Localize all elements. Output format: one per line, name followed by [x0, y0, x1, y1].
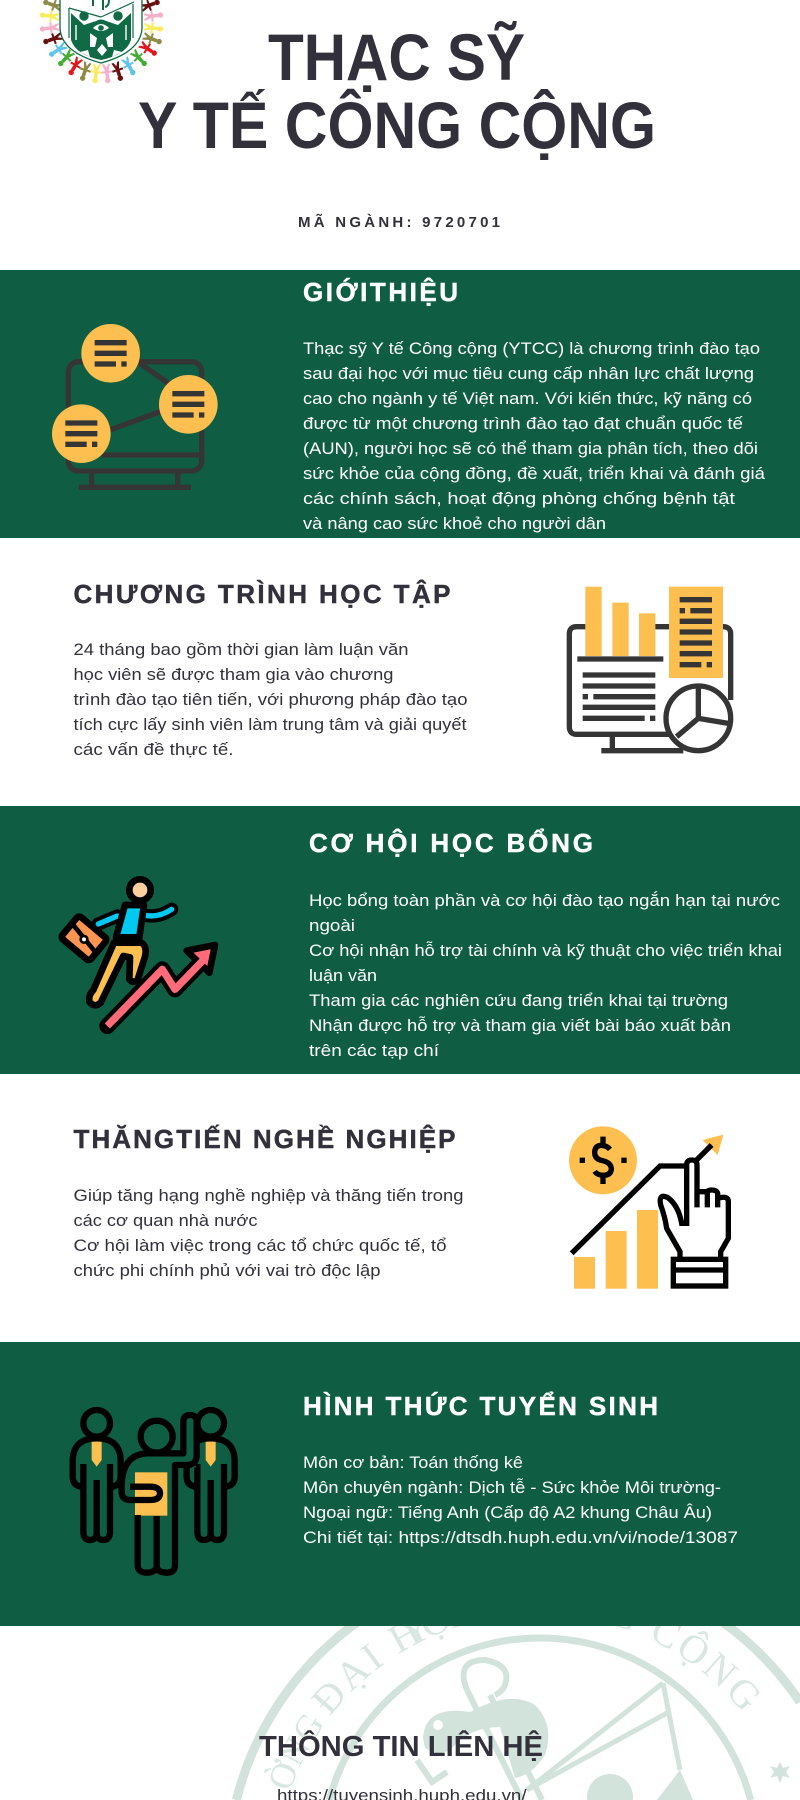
- text: introduction: sức khỏe của cộng đồng, đề xuất, triển khai và đánh giá: [303, 464, 766, 483]
- text: study program: [74, 640, 468, 759]
- text: career advancement: [74, 1186, 464, 1280]
- text: study program: các vấn đề thực tế.: [74, 740, 234, 759]
- text: scholarship: luận văn: [309, 966, 377, 985]
- icon: dashboard monitor: [569, 587, 731, 751]
- watermark seal: ỜNG: [264, 1714, 322, 1788]
- text: introduction: [303, 339, 766, 533]
- panel: study program: [74, 579, 731, 759]
- heading: contact information: THÔNG TIN LIÊN HỆ: [259, 1729, 543, 1763]
- heading: admissions: HÌNH THỨC TUYỂN SINH: [303, 1391, 658, 1421]
- title: [138, 20, 656, 162]
- text: scholarship: [309, 891, 782, 1060]
- text: introduction: cao cho ngành y tế Việt nam. Với kiến thức, kỹ năng có: [303, 389, 752, 408]
- logo: university emblem: [39, 0, 164, 84]
- text: introduction: và nâng cao sức khoẻ cho người dân: [303, 514, 606, 533]
- panel: career advancement: [74, 1124, 728, 1289]
- text: scholarship: Tham gia các nghiên cứu đang triển khai tại trường: [309, 991, 728, 1010]
- title: Y TẾ CÔNG CỘNG: [138, 88, 656, 162]
- text: introduction: được từ một chương trình đào tạo đạt chuẩn quốc tế: [303, 414, 744, 433]
- text: introduction: các chính sách, hoạt động phòng chống bệnh tật: [303, 489, 735, 508]
- text: admissions: Ngoại ngữ: Tiếng Anh (Cấp độ A2 khung Châu Âu): [303, 1503, 712, 1522]
- text: career advancement: Giúp tăng hạng nghề nghiệp và thăng tiến trong: [74, 1186, 464, 1205]
- heading: scholarship: CƠ HỘI HỌC BỔNG: [309, 828, 593, 858]
- watermark seal: Y TẾ CÔNG CỘNG: [403, 1626, 760, 1710]
- text: career advancement: Cơ hội làm việc trong các tổ chức quốc tế, tổ: [74, 1236, 447, 1255]
- heading: career advancement: THĂNGTIẾN NGHỀ NGHIỆP: [74, 1124, 456, 1154]
- watermark seal: ĐẠI HỌC: [310, 1626, 448, 1716]
- watermark seal: [232, 1626, 800, 1800]
- icon: person climbing arrow: [60, 879, 215, 1026]
- icon: three people: [73, 1410, 235, 1573]
- text: introduction: Thạc sỹ Y tế Công cộng (YTCC) là chương trình đào tạo: [303, 339, 760, 358]
- text: career advancement: chức phi chính phủ với vai trò độc lập: [74, 1261, 380, 1280]
- text: study program: 24 tháng bao gồm thời gian làm luận văn: [74, 640, 408, 659]
- text: scholarship: Học bổng toàn phần và cơ hội đào tạo ngắn hạn tại nước: [309, 891, 781, 910]
- icon: monitor with notes: [52, 324, 218, 487]
- text: admissions: Môn chuyên ngành: Dịch tễ - Sức khỏe Môi trường-: [303, 1478, 721, 1497]
- title: THẠC SỸ: [268, 20, 525, 94]
- panel: scholarship: [0, 806, 800, 1074]
- text: scholarship: ngoài: [309, 916, 355, 935]
- heading: study program: CHƯƠNG TRÌNH HỌC TẬP: [74, 579, 450, 609]
- text: admissions: [303, 1453, 738, 1547]
- icon: hand pointing at growth chart: [569, 1126, 728, 1289]
- text: study program: trình đào tạo tiên tiến, với phương pháp đào tạo: [74, 690, 468, 709]
- text: scholarship: Nhận được hỗ trợ và tham gia viết bài báo xuất bản: [309, 1016, 731, 1035]
- text: study program: tích cực lấy sinh viên làm trung tâm và giải quyết: [74, 715, 467, 734]
- text: introduction: (AUN), người học sẽ có thể tham gia phân tích, theo dõi: [303, 439, 758, 458]
- heading: introduction: GIỚITHIỆU: [303, 277, 458, 307]
- panel: introduction: [0, 270, 800, 538]
- text: scholarship: trên các tạp chí: [309, 1041, 439, 1060]
- panel: admissions: [0, 1342, 800, 1626]
- text: scholarship: Cơ hội nhận hỗ trợ tài chính và kỹ thuật cho việc triển khai: [309, 941, 782, 960]
- text: study program: học viên sẽ được tham gia vào chương: [74, 665, 394, 684]
- subtitle: program code: MÃ NGÀNH: 9720701: [298, 213, 500, 231]
- text: admissions: Chi tiết tại: https://dtsdh.huph.edu.vn/vi/node/13087: [303, 1528, 738, 1547]
- text: admissions: Môn cơ bản: Toán thống kê: [303, 1453, 523, 1472]
- text: introduction: sau đại học với mục tiêu cung cấp nhân lực chất lượng: [303, 364, 754, 383]
- text: career advancement: các cơ quan nhà nước: [74, 1211, 258, 1230]
